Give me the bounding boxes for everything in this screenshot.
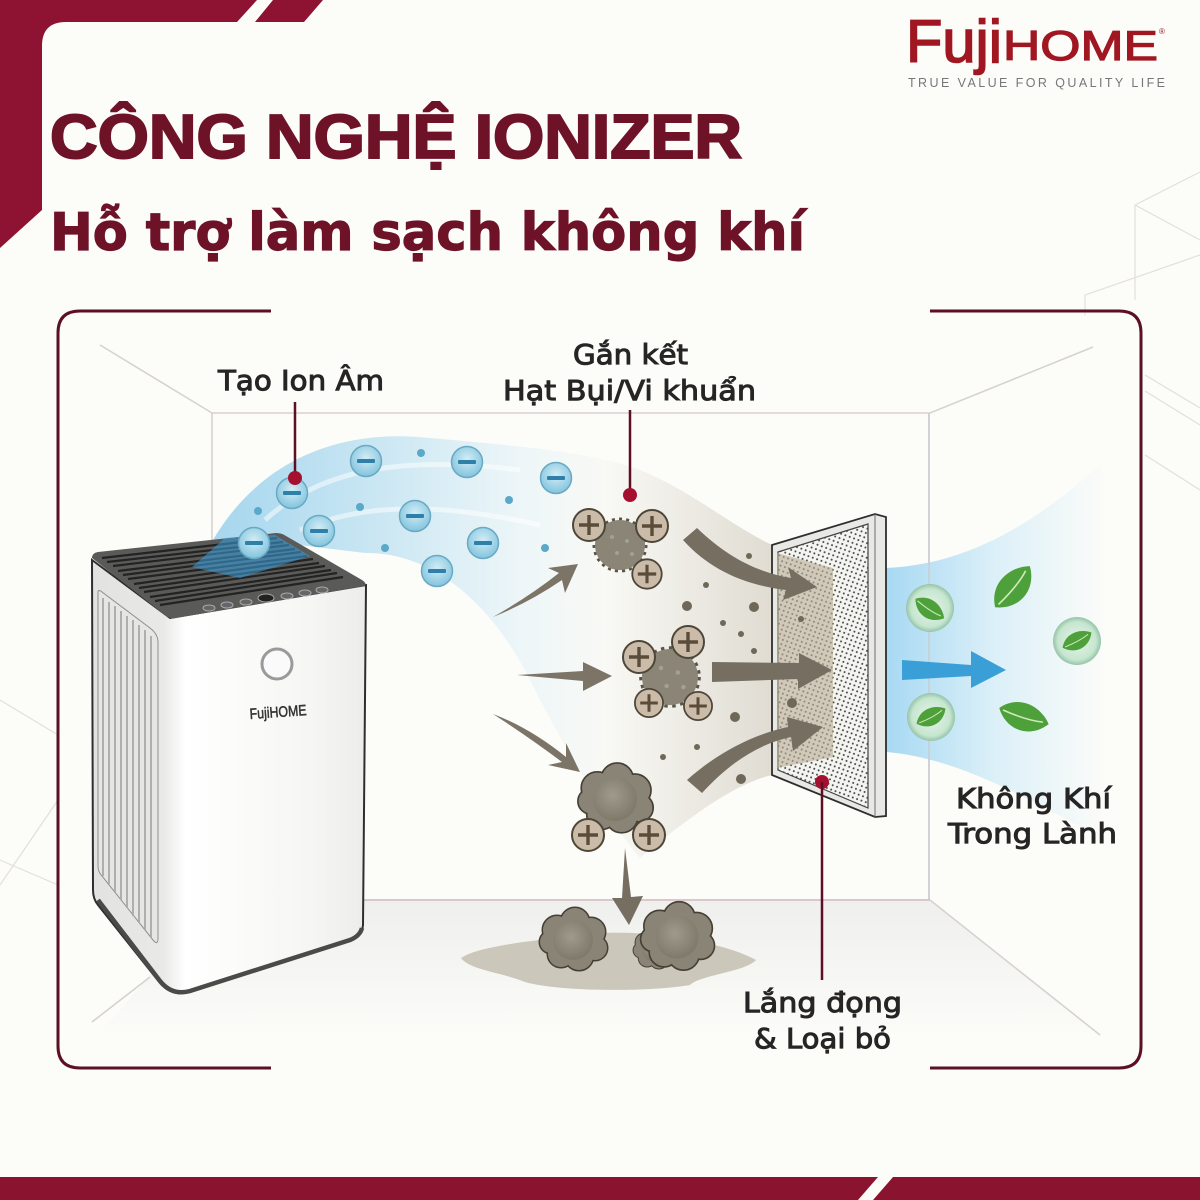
dust cluster middle [623, 626, 712, 720]
product logo: FujiHOME [249, 702, 307, 723]
callout: Không Khí Trong Lành: Trong Lành [947, 817, 1117, 850]
negative ions [238, 446, 572, 586]
room floor [95, 900, 1105, 1040]
callout: Lắng đọng & Loại bỏ [743, 775, 902, 1055]
side grille [98, 590, 158, 943]
incoming arrow top [493, 564, 578, 617]
callout: Không Khí Trong Lành [947, 782, 1117, 850]
top panel [92, 533, 366, 618]
dust cluster bottom [572, 764, 665, 851]
top-left corner frame [0, 0, 323, 248]
purifier body [92, 560, 366, 993]
power ring [262, 649, 292, 679]
free leaf upper [985, 564, 1041, 611]
control buttons [203, 587, 328, 611]
free leaf lower [996, 689, 1050, 744]
callout: Lắng đọng & Loại bỏ: & Loại bỏ [754, 1022, 891, 1055]
callout: Tạo Ion Âm: Tạo Ion Âm [217, 363, 384, 397]
logo: HOME [1003, 22, 1158, 69]
filter panel [772, 514, 886, 817]
settled dust puddle [461, 933, 756, 990]
settled dust clumps [540, 902, 714, 970]
arrow to filter middle [712, 653, 832, 689]
room frame left bracket [58, 311, 271, 1068]
logo [906, 8, 1165, 90]
air purifier [92, 533, 366, 993]
logo: Fuji [906, 8, 1002, 75]
filter frame [772, 514, 886, 817]
blue arrow [902, 651, 1006, 688]
room frame right bracket [930, 311, 1141, 1068]
logo: ® [1159, 27, 1165, 36]
fresh air flow [886, 460, 1105, 840]
small blue particles [254, 449, 549, 552]
captured dust layer [777, 553, 833, 768]
callout: Gắn kết Hạt Bụi/Vi khuẩn [503, 338, 756, 502]
callout: Gắn kết Hạt Bụi/Vi khuẩn: Gắn kết [573, 338, 688, 371]
bottom bar [0, 1177, 1200, 1200]
subtitle: Hỗ trợ làm sạch không khí [50, 203, 808, 263]
grey dust particles [660, 553, 804, 784]
arrow to filter bottom [687, 717, 823, 793]
filter mesh [778, 524, 868, 808]
ion and dust air flow [213, 436, 772, 858]
fresh air bubbles with leaves [906, 584, 1101, 741]
top vents [102, 538, 343, 605]
incoming arrow bottom [493, 714, 580, 772]
incoming arrow middle [517, 662, 612, 691]
dust cluster top [573, 509, 668, 589]
callout: Lắng đọng & Loại bỏ: Lắng đọng [743, 986, 902, 1019]
logo: TRUE VALUE FOR QUALITY LIFE [908, 76, 1165, 90]
callout: Không Khí Trong Lành: Không Khí [956, 782, 1112, 815]
callout: Gắn kết Hạt Bụi/Vi khuẩn: Hạt Bụi/Vi khuẩn [503, 374, 756, 407]
callout: Tạo Ion Âm [217, 363, 384, 485]
arrow downward [612, 848, 643, 925]
purifier base strip [98, 900, 362, 992]
room perspective lines [92, 345, 1100, 1035]
ion stream over vents [192, 535, 310, 578]
arrow to filter top [683, 528, 817, 600]
title: CÔNG NGHỆ IONIZER [50, 103, 742, 172]
